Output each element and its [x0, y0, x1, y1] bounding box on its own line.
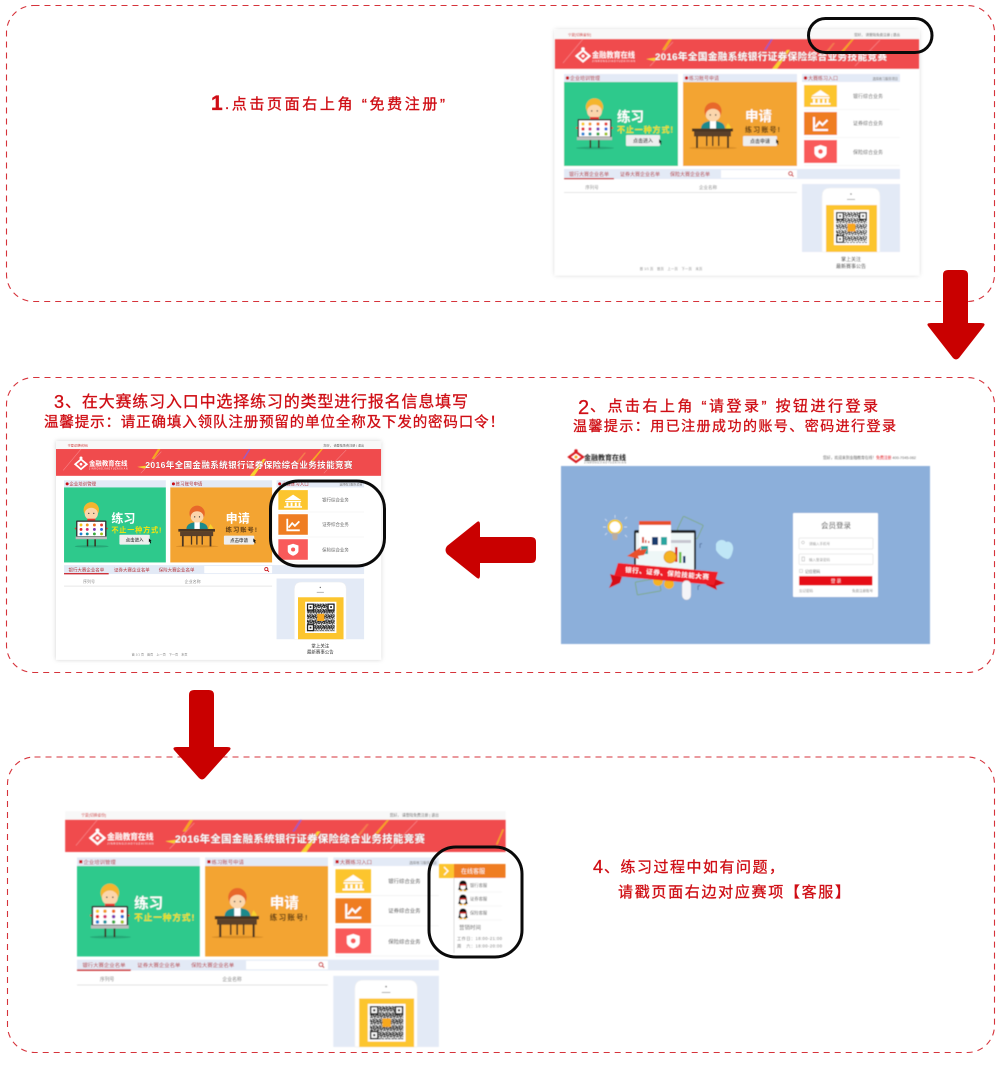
screenshot: step 4 homepage: 练习账号申请: [212, 858, 244, 866]
screenshot: step 4 homepage: JINRONGJIAOYUZAIXIAN: [107, 841, 154, 845]
login page header: JINRONGJIAOYUZAIXIAN: [584, 462, 626, 464]
heading: step 1 instruction: .点击页面右上角 “免费注册”: [225, 96, 445, 113]
screenshot: step 1 homepage: 证券综合业务: [853, 120, 883, 127]
screenshot: step 4 homepage: 证券大赛企业名单: [137, 961, 181, 969]
screenshot: step 1 homepage: 您好， 请登陆免费注册 | 退出: [854, 32, 900, 37]
screenshot: step 1 homepage: 企业培训管理: [570, 75, 600, 82]
screenshot: step 3 homepage: 银行大赛企业名单: [69, 566, 105, 573]
screenshot: step 3 homepage: 企业培训管理: [69, 481, 97, 488]
screenshot: step 3 homepage: 最新赛事公告: [307, 649, 334, 656]
heading: step 2 instruction: 2: [578, 397, 589, 419]
heading: step 4 instruction: 请戳页面右边对应赛项【客服】: [618, 883, 850, 901]
screenshot: step 3 homepage: 选择练习服务项目: [340, 483, 362, 487]
screenshot: step 3 homepage: 证券大赛企业名单: [114, 566, 150, 573]
screenshot: step 3 homepage: 序列号: [83, 578, 95, 584]
arrow: left to step 3: [446, 521, 536, 579]
screenshot: step 4 homepage: 保险大赛企业名单: [191, 961, 235, 969]
screenshot: step 3 homepage: 申请: [226, 510, 250, 525]
login card: 会员登录: [821, 520, 851, 530]
screenshot: step 4 homepage: 企业名称: [222, 976, 242, 983]
screenshot: step 3 homepage: 大赛练习入口: [282, 481, 309, 488]
screenshot: step 2 login page: [561, 449, 930, 644]
screenshot: step 4 homepage: 序列号: [100, 976, 115, 983]
login card: 登 录: [831, 578, 842, 584]
screenshot: step 3 homepage: JINRONGJIAOYUZAIXIAN: [89, 468, 128, 471]
panel: step 4 frame: [8, 757, 994, 1052]
screenshot: step 1 homepage: 练习: [617, 108, 644, 124]
screenshot: step 3 homepage: 2016年全国金融系统银行证券保险综合业务技能竞赛: [145, 459, 353, 470]
screenshot: step 4 homepage: 证券综合业务: [388, 906, 421, 914]
screenshot: step 3 homepage: 宁夏[切换省份]: [68, 442, 88, 447]
screenshot: step 4 homepage: 您好， 请登陆免费注册 | 退出: [390, 812, 439, 817]
screenshot: step 4 homepage: 2016年全国金融系统银行证券保险综合业务技能竞赛: [175, 832, 426, 845]
screenshot: step 1 homepage: 选择练习服务项目: [872, 76, 898, 81]
screenshot: step 4 homepage: 大赛练习入口: [340, 858, 372, 866]
login page header: 金融教育在线: [584, 453, 626, 462]
blue background: [561, 466, 930, 644]
screenshot: step 1 homepage: 银行综合业务: [853, 93, 883, 100]
arrow: down to step 2: [927, 270, 985, 360]
login page header: [569, 449, 916, 464]
screenshot: step 1 homepage: 2016年全国金融系统银行证券保险综合业务技能竞赛: [655, 51, 887, 63]
screenshot: step 4 homepage: 银行综合业务: [388, 877, 421, 885]
login card: 免费注册账号: [852, 588, 873, 593]
screenshot: step 1 homepage: 宁夏[切换省份]: [568, 32, 591, 37]
screenshot: step 4 homepage: 选择练习服务项目: [409, 860, 437, 865]
screenshot: step 3 homepage: 证券综合业务: [322, 521, 349, 528]
screenshot: step 3 homepage: 企业名称: [185, 578, 201, 584]
heading: step 2 instruction: 温馨提示：用已注册成功的账号、密码进行登录: [573, 418, 896, 434]
screenshot: step 3 homepage: 银行综合业务: [322, 497, 349, 504]
arrow: down to step 4: [173, 690, 231, 780]
screenshot: step 4 homepage: 保险综合业务: [388, 938, 421, 946]
panel: online customer service: 在线客服: [461, 868, 485, 876]
screenshot: step 3 homepage: 掌上关注: [311, 642, 330, 649]
screenshot: step 4 homepage: 宁夏[切换省份]: [81, 812, 106, 817]
screenshot: step 1 homepage: 掌上关注: [841, 256, 861, 263]
screenshot: step 3 homepage: 点击申请: [230, 537, 249, 544]
screenshot: step 3 homepage: [56, 441, 381, 660]
heading: step 4 instruction: [593, 857, 850, 901]
screenshot: step 1 homepage: 点击进入: [633, 138, 653, 144]
screenshot: step 1 homepage: [555, 30, 919, 275]
screenshot: step 1 homepage: 不止一种方式!: [617, 124, 673, 134]
screenshot: step 1 homepage: 练习账号申请: [689, 75, 719, 82]
screenshot: step 1 homepage: 保险综合业务: [853, 149, 883, 156]
login card: 忘记密码: [799, 588, 813, 593]
screenshot: step 4 homepage: 银行大赛企业名单: [82, 961, 126, 969]
screenshot: step 4 homepage: 练习账号!: [270, 912, 307, 922]
screenshot: step 1 homepage: 申请: [745, 108, 772, 124]
screenshot: step 3 homepage: 练习: [111, 511, 135, 526]
login page header: 您好，欢迎来到金融教育在线！免费注册 400-7045-062: [823, 455, 916, 460]
panel: step 2 and 3 frame: [6, 378, 994, 672]
screenshot: step 3 homepage: 您好， 请登陆免费注册 | 退出: [323, 442, 364, 447]
screenshot: step 3 homepage: 点击进入: [126, 536, 144, 543]
heading: step 3 instruction: 温馨提示：请正确填入领队注册预留的单位全称及下发的密码口令！: [44, 413, 504, 431]
screenshot: step 3 homepage: 首 1/1 页 首页 上一页 下一页 末页: [132, 651, 187, 656]
screenshot: step 3 homepage: 金融教育在线: [89, 459, 128, 468]
screenshot: step 3 homepage: 不止一种方式!: [111, 526, 161, 535]
screenshot: step 1 homepage: 序列号: [585, 184, 599, 191]
panel: online customer service: 证券客服: [470, 896, 488, 902]
panel: online customer service: [439, 864, 506, 954]
highlight: step 3 entry outline: [270, 481, 384, 566]
screenshot: step 1 homepage: 保险大赛企业名单: [670, 171, 710, 178]
screenshot: step 4 homepage: [65, 811, 506, 1047]
screenshot: step 4 homepage: 练习: [134, 895, 163, 913]
screenshot: step 3 homepage: 练习账号!: [226, 525, 257, 534]
screenshot: step 1 homepage: 最新赛事公告: [836, 263, 866, 270]
login card: 记住密码: [805, 569, 820, 574]
screenshot: step 1 homepage: 证券大赛企业名单: [620, 171, 660, 178]
login card: [793, 513, 878, 597]
login card: 请输入手机号: [809, 541, 830, 546]
heading: step 3 instruction: 、在大赛练习入口中选择练习的类型进行报名信息填写: [65, 392, 468, 411]
screenshot: step 1 homepage: 练习账号!: [745, 125, 780, 134]
screenshot: step 1 homepage: 大赛练习入口: [808, 75, 838, 82]
highlight: step 1 top right outline: [808, 18, 932, 52]
heading: step 2 instruction: 、点击右上角 “请登录” 按钮进行登录: [590, 398, 878, 415]
heading: step 4 instruction: 、练习过程中如有问题，: [604, 859, 784, 876]
heading: step 3 instruction: [44, 392, 504, 431]
login card: 输入登录密码: [809, 557, 830, 562]
panel: online customer service: 保险客服: [470, 910, 488, 916]
panel: online customer service: 银行客服: [470, 882, 488, 889]
heading: step 1 instruction: 1: [211, 92, 223, 115]
heading: step 2 instruction: [573, 397, 896, 434]
heading: step 4 instruction: 4: [593, 857, 603, 877]
screenshot: step 1 homepage: 点击申请: [750, 138, 770, 145]
panel: online customer service: 营销时间: [459, 924, 481, 932]
illustration: skills contest: [603, 515, 733, 600]
screenshot: step 4 homepage: 企业培训管理: [83, 858, 116, 866]
screenshot: step 3 homepage: 保险综合业务: [322, 547, 349, 554]
illustration: skills contest: 银行、证券、保险技能大赛: [625, 565, 710, 581]
screenshot: step 4 homepage: 不止一种方式!: [134, 911, 195, 922]
panel: online customer service: 工作日：18:00-21:00: [457, 935, 503, 942]
screenshot: step 3 homepage: 保险大赛企业名单: [159, 566, 195, 573]
panel: step 1 frame: [6, 6, 994, 302]
screenshot: step 1 homepage: 金融教育在线: [592, 50, 635, 60]
screenshot: step 1 homepage: 首 1/1 页 首页 上一页 下一页 末页: [640, 266, 703, 271]
screenshot: step 1 homepage: JINRONGJIAOYUZAIXIAN: [592, 60, 635, 63]
screenshot: step 4 homepage: 金融教育在线: [107, 832, 154, 842]
screenshot: step 4 homepage: 申请: [270, 894, 299, 912]
screenshot: step 1 homepage: 银行大赛企业名单: [569, 171, 609, 178]
heading: step 1 instruction: [211, 92, 445, 115]
screenshot: step 1 homepage: 企业名称: [699, 184, 717, 191]
heading: step 3 instruction: 3: [54, 392, 64, 412]
highlight: customer service outline: [429, 847, 522, 957]
screenshot: step 3 homepage: 练习账号申请: [176, 481, 203, 488]
panel: online customer service: 周 六：18:00-20:00: [457, 942, 503, 950]
